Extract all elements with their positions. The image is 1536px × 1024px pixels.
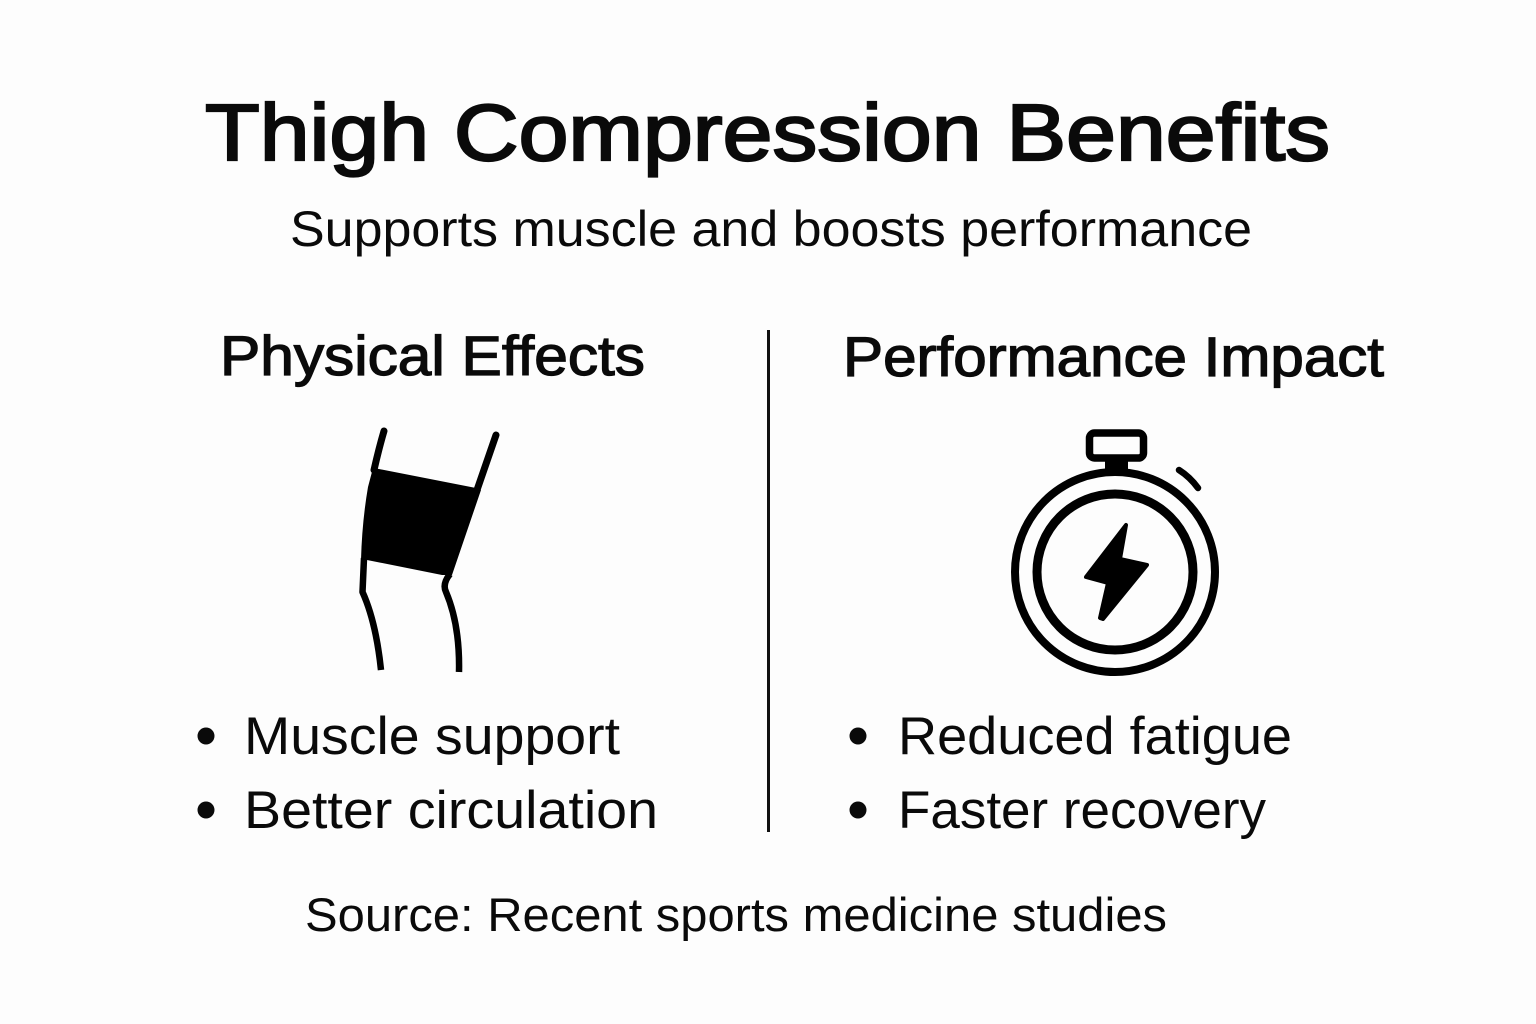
source note: Source: Recent sports medicine studies [305,888,1167,941]
bullet list: performance impact: Reduced fatigue [898,707,1292,766]
icon: thigh with compression sleeve [361,431,496,672]
heading: physical effects: Physical Effects [220,324,645,387]
title: Thigh Compression Benefits [205,88,1330,177]
panel: performance impact [843,325,1384,840]
panel: physical effects [198,324,658,840]
icon: stopwatch with lightning bolt [1015,433,1215,672]
heading: performance impact: Performance Impact [843,325,1384,388]
subtitle: Supports muscle and boosts performance [290,201,1252,257]
bullet list: physical effects: Better circulation [244,781,658,840]
bullet list: performance impact [850,707,1292,840]
center divider [767,330,770,832]
bullet list: physical effects: Muscle support [244,707,620,766]
bullet list: performance impact: Faster recovery [898,781,1266,840]
bullet list: physical effects [198,707,658,840]
